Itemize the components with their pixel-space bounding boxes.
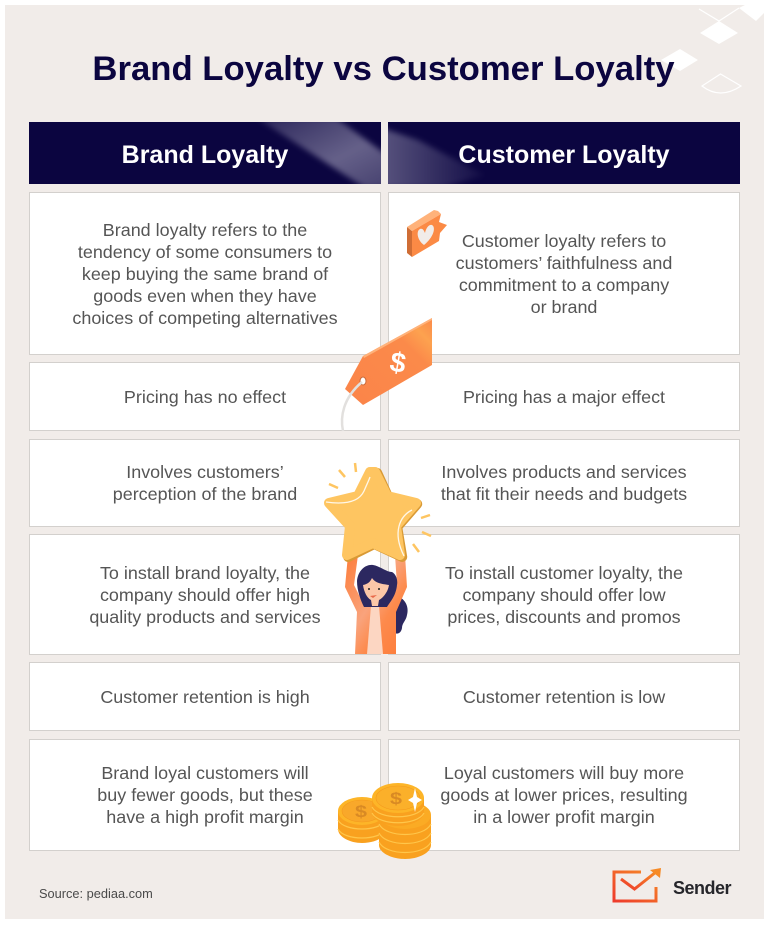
header: Brand Loyalty: Brand Loyalty <box>122 141 288 169</box>
header: Brand Loyalty <box>29 122 381 184</box>
row 6 left <box>29 739 381 851</box>
right stack lower <box>379 815 431 859</box>
row 6 right: in a lower profit margin <box>473 807 655 827</box>
row 3 left: perception of the brand <box>113 484 297 504</box>
illustration: coin stacks: $ <box>390 790 402 808</box>
illustration: woman holding star <box>324 462 432 654</box>
illustration: coin stacks: $ <box>355 803 367 821</box>
row 5 right: Customer retention is low <box>463 686 665 706</box>
face <box>363 578 389 606</box>
row 1 left: tendency of some consumers to <box>78 242 332 262</box>
row 2 right <box>388 362 740 431</box>
row 6 left: buy fewer goods, but these <box>97 785 313 805</box>
row 5 left <box>29 662 381 731</box>
row 1 left <box>29 192 381 355</box>
row 1 right: Customer loyalty refers to <box>462 230 666 250</box>
hair <box>357 565 397 607</box>
illustration: coin stacks <box>338 783 432 859</box>
title: Brand Loyalty vs Customer Loyalty <box>92 50 675 88</box>
left stack <box>338 811 386 843</box>
row 1 right: customers’ faithfulness and <box>456 252 672 272</box>
row 1 right <box>388 192 740 355</box>
row 5 right <box>388 662 740 731</box>
row 4 right <box>388 534 740 655</box>
row 6 left: have a high profit margin <box>106 807 304 827</box>
row 4 right: company should offer low <box>462 584 666 604</box>
row 6 right: goods at lower prices, resulting <box>440 785 688 805</box>
star <box>329 472 416 555</box>
header: Customer Loyalty: Customer Loyalty <box>458 141 670 169</box>
row 2 left <box>29 362 381 431</box>
row 4 right: To install customer loyalty, the <box>445 562 683 582</box>
header: Customer Loyalty <box>388 122 740 184</box>
ponytail <box>394 598 408 634</box>
row 1 left: goods even when they have <box>93 286 317 306</box>
icon: heart speech bubble <box>407 210 447 257</box>
icon: price tag: $ <box>388 346 409 379</box>
row 1 right: commitment to a company <box>459 274 669 294</box>
row 1 left: Brand loyalty refers to the <box>103 220 307 240</box>
star highlights <box>326 477 370 503</box>
row 1 left: keep buying the same brand of <box>82 264 328 284</box>
rays <box>329 463 431 552</box>
star shadow <box>330 473 417 557</box>
logo: Sender <box>612 868 732 902</box>
logo wordmark: Sender <box>673 878 731 898</box>
right stack upper <box>372 798 424 826</box>
row 4 left: company should offer high <box>100 584 310 604</box>
row 4 left <box>29 534 381 655</box>
arms and body <box>345 555 407 654</box>
row 6 left: Brand loyal customers will <box>101 763 309 783</box>
row 4 left: To install brand loyalty, the <box>100 562 310 582</box>
row 2 left: Pricing has no effect <box>124 386 286 406</box>
row 6 right: Loyal customers will buy more <box>444 763 684 783</box>
row 3 right: Involves products and services <box>441 462 687 482</box>
shirt <box>367 606 383 654</box>
sparkle <box>408 788 422 812</box>
icon: price tag <box>340 318 432 431</box>
row 4 right: prices, discounts and promos <box>447 606 681 626</box>
row 1 right: or brand <box>531 296 597 316</box>
row 3 right <box>388 439 740 527</box>
row 1 left: choices of competing alternatives <box>72 308 338 328</box>
row 5 left: Customer retention is high <box>100 686 310 706</box>
row 3 left: Involves customers’ <box>126 462 284 482</box>
row 4 left: quality products and services <box>89 606 321 626</box>
row 6 right <box>388 739 740 851</box>
row 2 right: Pricing has a major effect <box>463 386 665 406</box>
source note: Source: pediaa.com <box>39 886 153 901</box>
row 3 right: that fit their needs and budgets <box>441 484 687 504</box>
icon: envelope with arrow <box>612 868 661 902</box>
row 3 left <box>29 439 381 527</box>
